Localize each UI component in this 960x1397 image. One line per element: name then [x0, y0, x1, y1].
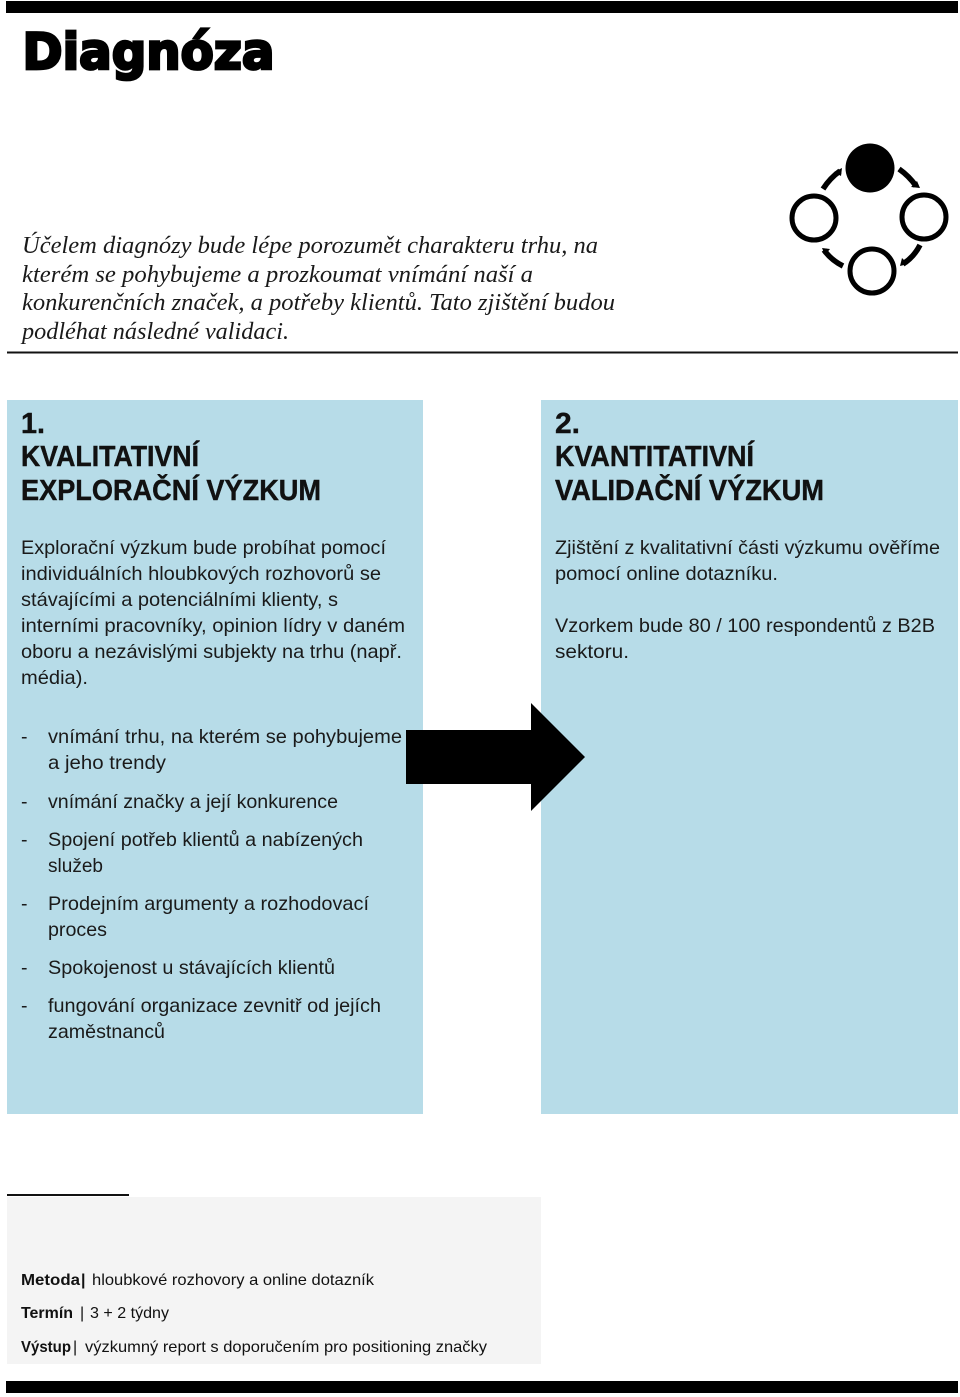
panel 1 description: individuálních hloubkových rozhovorů se — [21, 563, 381, 585]
panel 1 description — [21, 537, 405, 689]
panel 1 bullet list: a jeho trendy — [48, 752, 166, 774]
intro text: podléhat následné validaci. — [20, 319, 289, 345]
panel 1 description: stávajícími a potenciálními klienty, s — [21, 589, 338, 611]
panel 1 heading: EXPLORAČNÍ VÝZKUM — [21, 473, 321, 507]
title: Diagnóza — [22, 23, 274, 81]
summary: output: Výstup — [21, 1339, 71, 1356]
panel 1 bullet list: Spokojenost u stávajících klientů — [48, 957, 335, 979]
panel 1: qualitative research — [7, 400, 423, 1114]
summary panel — [7, 1197, 541, 1364]
panel 1 bullet list — [21, 726, 402, 1043]
summary: method: Metoda — [21, 1272, 80, 1289]
panel 1 bullet list: - — [21, 893, 28, 915]
panel 2: quantitative research — [541, 400, 958, 1114]
panel 1 bullet list: služeb — [48, 855, 103, 877]
icon: cycle of four circles — [792, 144, 946, 293]
panel 2 description: Zjištění z kvalitativní části výzkumu ověříme — [555, 537, 940, 559]
panel 1 description: interními pracovníky, opinion lídry v daném — [21, 615, 405, 637]
summary: output: výzkumný report s doporučením pro positioning značky — [85, 1339, 487, 1356]
intro text: kterém se pohybujeme a prozkoumat vnímání naší a — [22, 262, 533, 288]
panel 1 description: média). — [21, 667, 88, 689]
panel 1 heading — [21, 408, 321, 507]
panel 1 bullet list: - — [21, 957, 28, 979]
panel 1 bullet list: - — [21, 995, 28, 1017]
panel 1 bullet list: - — [21, 829, 28, 851]
panel 1 description: Explorační výzkum bude probíhat pomocí — [21, 537, 387, 559]
intro text — [20, 232, 615, 345]
panel 1 bullet list: vnímání značky a její konkurence — [48, 791, 338, 813]
panel 1 bullet list: proces — [48, 919, 107, 941]
summary: output: | — [73, 1339, 77, 1356]
panel 1 heading: KVALITATIVNÍ — [21, 439, 200, 473]
panel 1 bullet list: Prodejním argumenty a rozhodovací — [48, 893, 370, 915]
panel 1 bullet list: - — [21, 726, 28, 748]
summary: method: | — [81, 1272, 85, 1289]
summary: timing: Termín — [21, 1305, 73, 1322]
summary: timing: 3 + 2 týdny — [90, 1305, 169, 1322]
panel 1 bullet list: zaměstnanců — [48, 1021, 165, 1043]
short rule above summary — [7, 1194, 129, 1196]
top black bar — [6, 1, 958, 13]
panel 1 description: oboru a nezávislými subjekty na trhu (např. — [21, 641, 402, 663]
summary: timing: | — [80, 1305, 84, 1322]
panel 1 bullet list: vnímání trhu, na kterém se pohybujeme — [48, 726, 402, 748]
intro text: konkurenčních značek, a potřeby klientů. Tato zjištění budou — [22, 290, 615, 316]
divider under intro — [7, 352, 958, 354]
panel 2 heading: 2. — [555, 408, 580, 440]
arrow between panels — [406, 703, 585, 811]
summary: timing — [21, 1305, 169, 1322]
intro text: Účelem diagnózy bude lépe porozumět charakteru trhu, na — [22, 232, 598, 259]
panel 1 bullet list: Spojení potřeb klientů a nabízených — [48, 829, 363, 851]
panel 1 bullet list: fungování organizace zevnitř od jejích — [48, 995, 381, 1017]
panel 2 heading: VALIDAČNÍ VÝZKUM — [555, 473, 824, 507]
panel 1 heading: 1. — [21, 408, 45, 440]
panel 2 description: pomocí online dotazníku. — [555, 563, 778, 585]
bottom black bar — [6, 1381, 958, 1393]
panel 2 heading: KVANTITATIVNÍ — [555, 439, 755, 473]
panel 2 description — [555, 537, 940, 663]
panel 2 description: sektoru. — [555, 641, 629, 663]
panel 1 bullet list: - — [21, 791, 28, 813]
summary: method: hloubkové rozhovory a online dotazník — [92, 1272, 375, 1289]
panel 2 description: Vzorkem bude 80 / 100 respondentů z B2B — [555, 615, 935, 637]
panel 2 heading — [555, 408, 824, 507]
